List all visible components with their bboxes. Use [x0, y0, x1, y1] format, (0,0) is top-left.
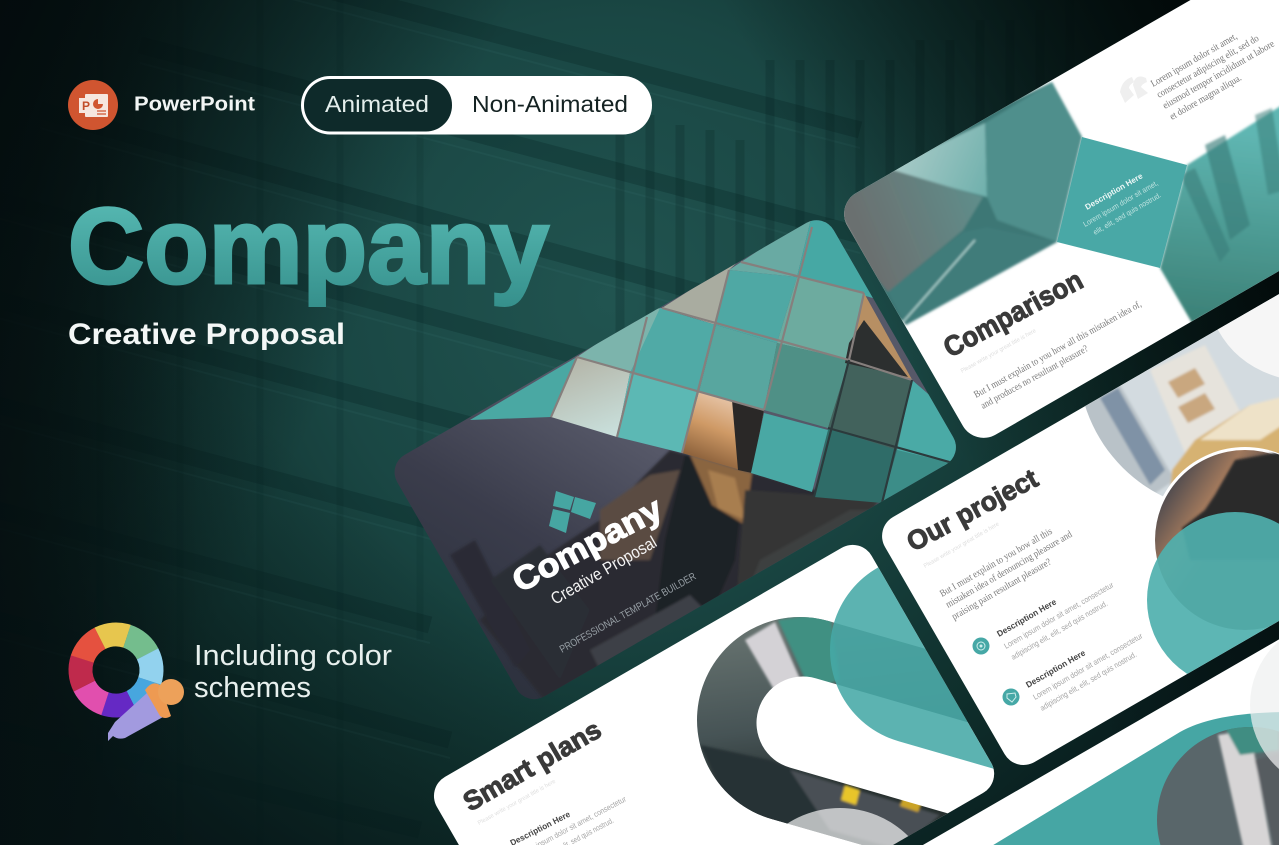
street photo: [830, 82, 1082, 325]
toggle: Animated / Non-Animated: Non-Animated: [472, 91, 628, 117]
teal band: [985, 712, 1279, 845]
slide: smart plans: [434, 544, 994, 845]
quote mark: [1120, 77, 1148, 103]
smart plans heading: Smart plans: [458, 714, 606, 817]
quote text: Lorem ipsum dolor sit amet,: [1149, 31, 1239, 90]
smart plans caption: Please write your great title is here: [477, 779, 557, 827]
white capsule: [803, 723, 1100, 809]
diamond grid of teal cells: [470, 215, 970, 520]
icon: colour wheel with dropper: [68, 622, 184, 741]
title: Company: Company: [68, 185, 549, 306]
quote text: consectetur adipiscing elit, sed do: [1155, 33, 1261, 101]
forest photo: [1160, 100, 1279, 323]
slide: cover: [394, 220, 956, 700]
description hexagon: [1057, 137, 1187, 268]
comparison caption: Please write your great title is here: [960, 328, 1038, 375]
city photo circle: [1152, 447, 1279, 633]
description hexagon: elit, elit, sed quis nostrud.: [1092, 190, 1163, 237]
street photo circle: [1157, 727, 1279, 845]
building photo: [1085, 294, 1279, 496]
description hexagon: Description Here: [1084, 171, 1145, 212]
teal circle: [1147, 512, 1279, 688]
subtitle: Creative Proposal: Creative Proposal: [68, 318, 345, 351]
item: description 2: Lorem ipsum dolor sit amet, consectetur: [1032, 631, 1145, 702]
slide: bottom right: [923, 639, 1279, 845]
comparison body: But I must explain to you how all this mistaken idea of,: [972, 299, 1144, 401]
project body: [938, 526, 1074, 623]
item: description 2: adipiscing elit, elit, sed quis nostrud.: [1038, 650, 1138, 713]
text: Including color schemes: schemes: [194, 672, 311, 704]
icon: PowerPoint logo: P: [82, 99, 90, 113]
project body: mistaken idea of denouncing pleasure and: [944, 529, 1074, 611]
dark city photo in cover: [450, 450, 878, 697]
photo capsule: [697, 617, 994, 845]
comparison heading: Comparison: [938, 264, 1088, 363]
item: description 1: adipiscing elit, elit, sed quis nostrud.: [1010, 599, 1109, 662]
icon: diamond: [1002, 688, 1020, 706]
comparison body: [972, 299, 1144, 412]
item: description 1: Description Here: [995, 596, 1058, 639]
smart plans description: [508, 794, 628, 845]
description hexagon: Lorem ipsum dolor sit amet,: [1082, 178, 1160, 229]
pale arc: [1218, 294, 1279, 378]
cover tagline: PROFESSIONAL TEMPLATE BUILDER: [558, 570, 698, 656]
icon: target: [972, 638, 990, 654]
project heading: Our project: [902, 463, 1043, 557]
quote text: et dolore magna aliqua.: [1168, 73, 1244, 123]
text: Including color schemes: Including color: [194, 640, 392, 672]
toggle: Animated / Non-Animated: [301, 76, 652, 134]
teal capsule: [925, 650, 1150, 715]
cover subheading: Creative Proposal: [548, 533, 660, 608]
text: Including color schemes: [194, 640, 392, 704]
item: description 2: Description Here: [1024, 647, 1087, 690]
translucent circle: [788, 808, 908, 845]
slide: comparison: [830, 0, 1279, 460]
slide: our project: [882, 294, 1279, 765]
item: description 1: Lorem ipsum dolor sit amet, consectetur: [1002, 580, 1116, 651]
icon: PowerPoint logo: [68, 80, 118, 130]
cover heading: Company: [506, 489, 669, 599]
toggle: Animated / Non-Animated: Animated: [325, 91, 429, 117]
PowerPoint badge: [68, 80, 255, 130]
logo: teal squares: [549, 491, 596, 533]
grid lines: [551, 227, 912, 453]
translucent circle: [1250, 620, 1279, 790]
project caption: Please write your great title is here: [923, 521, 1001, 570]
comparison body: and produces no resultant pleasure?: [979, 343, 1091, 412]
label: PowerPoint: PowerPoint: [134, 94, 255, 116]
project body: But I must explain to you how all this: [938, 526, 1054, 600]
project body: praising pain resultant pleasure?: [950, 556, 1054, 623]
